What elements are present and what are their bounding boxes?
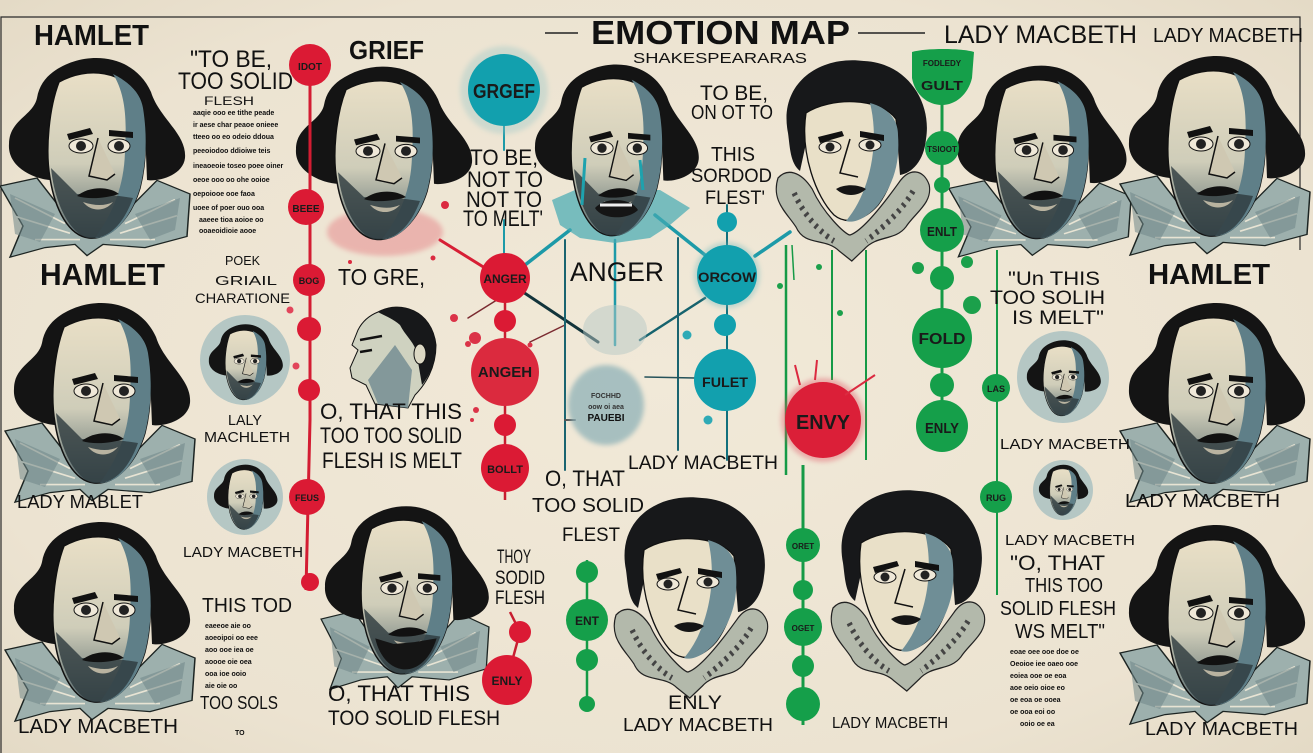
- nodes: cyan sorrow and fulet: FULET: [702, 374, 748, 390]
- node: cyan grief: [460, 46, 548, 134]
- quotes: TOO TOO SOLID: [320, 423, 462, 448]
- quotes: TOO SOLID: [532, 495, 644, 517]
- medallion: top left: [200, 315, 290, 405]
- portrait: Lady Macbeth top right man: [949, 66, 1131, 257]
- fine print: left quote: [193, 110, 284, 235]
- quotes: SORDOD: [691, 166, 772, 187]
- labels: Lady Macbeth captions: LADY MACBETH: [1145, 719, 1298, 739]
- quotes: FLESH: [204, 94, 254, 108]
- portrait: far right middle: [1120, 303, 1310, 502]
- quotes: TO BE,: [700, 82, 768, 105]
- nodes: cyan sorrow and fulet: [682, 212, 760, 424]
- timeline: green right column: GULT: [921, 78, 963, 93]
- timeline: red centre column: ANGEH: [478, 364, 532, 381]
- title block: [545, 14, 925, 67]
- quotes: "Un THIS: [1008, 269, 1100, 290]
- quotes: SODID: [495, 568, 545, 589]
- fine print: left quote: uoee of poer ouo ooa: [193, 205, 264, 212]
- headings: character names: ANGER: [570, 257, 664, 287]
- quotes: "O, THAT: [1010, 552, 1105, 575]
- timeline: green right column: FODLEDY: [923, 59, 962, 68]
- portrait: angry woman: [614, 497, 768, 698]
- quotes: TO MELT': [463, 206, 543, 231]
- quotes: O, THAT THIS: [328, 681, 470, 706]
- quotes: TOO SOLID: [178, 68, 293, 95]
- headings: character names: HAMLET: [40, 257, 165, 292]
- quotes: FLEST': [705, 188, 765, 209]
- headings: character names: HAMLET: [34, 20, 149, 52]
- portrait: far right top: [1120, 56, 1310, 255]
- timeline: green small nodes: RUG: [986, 493, 1006, 503]
- quotes: WS MELT": [1015, 621, 1105, 643]
- title block: EMOTION MAP: [591, 14, 850, 51]
- labels: Lady Macbeth captions: LADY MACBETH: [183, 544, 303, 561]
- timeline: red left column: BEEE: [292, 204, 320, 215]
- quotes: "TO BE,: [190, 46, 272, 73]
- labels: Lady Macbeth captions: LALY: [228, 412, 262, 429]
- node: envy: [781, 360, 875, 462]
- faded emblem: oow oi aea: [588, 404, 624, 411]
- fine print: lower right: eoae oee ooe doe oe: [1010, 649, 1079, 656]
- fine print: lower right: oe ooa eoi oo: [1010, 709, 1055, 716]
- labels: Lady Macbeth captions: ENLY: [668, 693, 722, 714]
- timeline: green small nodes: LAS: [987, 384, 1005, 394]
- portrait: right bottom: [1120, 525, 1310, 724]
- fine print: left quote: ineaoeoie toseo poee oiner: [193, 163, 284, 170]
- labels: Lady Macbeth captions: LADY MACBETH: [1000, 436, 1130, 453]
- fine print: lower left: aoeoipoi oo eee: [205, 635, 258, 642]
- fine print: left quote: peeoiodoo ddioiwe teis: [193, 148, 270, 155]
- quotes: CHARATIONE: [195, 290, 290, 306]
- quotes: NOT TO: [467, 167, 543, 192]
- quotes: O, THAT THIS: [320, 399, 462, 424]
- timeline: red left column: [286, 44, 331, 591]
- timeline: red left column: IDOT: [298, 62, 322, 73]
- portrait: Hamlet left middle: [5, 303, 195, 502]
- fine print: lower left: aie oie oo: [205, 683, 237, 690]
- timeline: green small nodes: [980, 374, 1012, 513]
- labels: Lady Macbeth captions: LADY MACBETH: [628, 453, 778, 474]
- fine print: left quote: oeoe ooo oo ohe ooioe: [193, 177, 270, 184]
- headings: character names: GRIEF: [349, 35, 424, 65]
- fine print: lower left: eaeeoe aie oo: [205, 623, 251, 630]
- connector lines: central web: [440, 126, 790, 470]
- quotes: [178, 46, 1116, 730]
- portrait: woman lower right: [831, 490, 985, 691]
- timeline: green bottom columns: [566, 528, 822, 721]
- faded emblem: FOCHHD: [591, 393, 621, 400]
- fine print: lower left: aoooe oie oea: [205, 659, 252, 666]
- portrait: Lady left bottom: [5, 522, 195, 721]
- labels: Lady Macbeth captions: LADY MACBETH: [832, 715, 948, 732]
- fine print: lower right: ooio oe ea: [1020, 721, 1055, 728]
- timeline: red centre column: ANGER: [483, 272, 527, 286]
- fine print: left quote: ooaeoidioie aooe: [199, 228, 256, 235]
- quotes: FLEST: [562, 525, 620, 546]
- quotes: O, THAT: [545, 466, 625, 491]
- medallion: lower right: [1033, 460, 1093, 520]
- medallion: lower left: [207, 459, 283, 535]
- quotes: THOY: [497, 547, 531, 568]
- quotes: TOO SOLS: [200, 693, 278, 713]
- headings: character names: HAMLET: [1148, 259, 1270, 291]
- fine print: lower left: TO: [235, 730, 245, 737]
- quotes: FLESH IS MELT: [322, 448, 462, 473]
- fine print: left quote: aaeee tioa aoioe oo: [199, 217, 264, 224]
- quotes: ON OT TO: [691, 102, 773, 124]
- fine print: left quote: oepoiooe ooe faoa: [193, 191, 255, 198]
- labels: Lady Macbeth captions: LADY MACBETH: [944, 21, 1137, 49]
- headings: character names: [34, 20, 1270, 292]
- fine print: lower left: ooa ioe ooio: [205, 671, 246, 678]
- portrait: crying man: [535, 65, 699, 243]
- quotes: POEK: [225, 253, 260, 268]
- timeline: green right column: TSIOOT: [927, 145, 957, 154]
- fine print: lower left: aoo ooe iea oe: [205, 647, 254, 654]
- labels: Lady Macbeth captions: LADY MABLET: [17, 492, 143, 512]
- quotes: GRIAIL: [215, 273, 277, 288]
- quotes: IS MELT": [1012, 308, 1104, 329]
- labels: Lady Macbeth captions: LADY MACBETH: [1005, 532, 1135, 549]
- timeline: green right column: ENLY: [925, 420, 959, 437]
- green drip lines: [777, 245, 997, 725]
- labels: Lady Macbeth captions: LADY MACBETH: [1125, 491, 1280, 511]
- fine print: lower right: oe eoa oe ooea: [1010, 697, 1061, 704]
- faded emblem: [568, 305, 647, 445]
- fine print: left quote: ir aese char peaoe onieee: [193, 122, 278, 129]
- fine print: lower right: Oeoioe iee oaeo ooe: [1010, 661, 1078, 668]
- portrait: bottom centre bearded man: [321, 506, 489, 689]
- quotes: THIS: [711, 144, 755, 166]
- portrait: profile man: [350, 307, 436, 408]
- fine print: left quote: aaqie ooo ee tithe peade: [193, 110, 274, 117]
- quotes: TO BE,: [470, 145, 538, 170]
- timeline: green bottom columns: OGET: [792, 624, 814, 633]
- quotes: TO GRE,: [338, 264, 425, 290]
- title block: SHAKESPEARARAS: [633, 50, 807, 67]
- quotes: TOO SOLID FLESH: [328, 707, 500, 730]
- node: envy: ENVY: [796, 412, 851, 434]
- quotes: NOT TO: [466, 187, 542, 212]
- fine print: lower right: aoe oeio oioe eo: [1010, 685, 1065, 692]
- nodes: cyan sorrow and fulet: ORCOW: [698, 269, 757, 285]
- timeline: red centre column: ENLY: [492, 674, 522, 688]
- portrait: woman top: [776, 60, 930, 261]
- labels: Lady Macbeth captions: LADY MACBETH: [1153, 25, 1303, 47]
- labels: Lady Macbeth captions: LADY MACBETH: [623, 715, 773, 735]
- timeline: green right column: FOLD: [918, 331, 966, 348]
- timeline: green right column: [912, 49, 974, 452]
- fine print: lower right: eoiea ooe oe eoa: [1010, 673, 1067, 680]
- node: cyan grief: GRGEF: [473, 81, 535, 103]
- labels: Lady Macbeth captions: LADY MACBETH: [18, 716, 178, 738]
- faded emblem: PAUEBI: [587, 413, 625, 424]
- quotes: TOO SOLIH: [990, 288, 1105, 309]
- fine print: left quote: tteeo oo eo odeio ddoua: [193, 134, 274, 141]
- portrait: Hamlet top left: [0, 58, 190, 257]
- timeline: red left column: FEUS: [295, 493, 319, 503]
- quotes: THIS TOD: [202, 595, 292, 617]
- timeline: red centre column: BOLLT: [487, 464, 523, 476]
- timeline: green bottom columns: ENT: [575, 614, 600, 628]
- quotes: FLESH: [495, 588, 545, 609]
- timeline: green bottom columns: ORET: [792, 542, 814, 551]
- quotes: SOLID FLESH: [1000, 598, 1116, 620]
- portrait: Hamlet grief: [296, 67, 472, 264]
- fine print: lower right: [1010, 649, 1079, 728]
- quotes: THIS TOO: [1025, 575, 1103, 597]
- timeline: red left column: BOG: [299, 276, 319, 286]
- timeline: red centre column: [450, 253, 539, 705]
- timeline: green right column: ENLT: [927, 224, 957, 239]
- fine print: lower left: [205, 623, 258, 737]
- medallion: upper right: [1017, 331, 1109, 423]
- labels: Lady Macbeth captions: MACHLETH: [204, 429, 290, 446]
